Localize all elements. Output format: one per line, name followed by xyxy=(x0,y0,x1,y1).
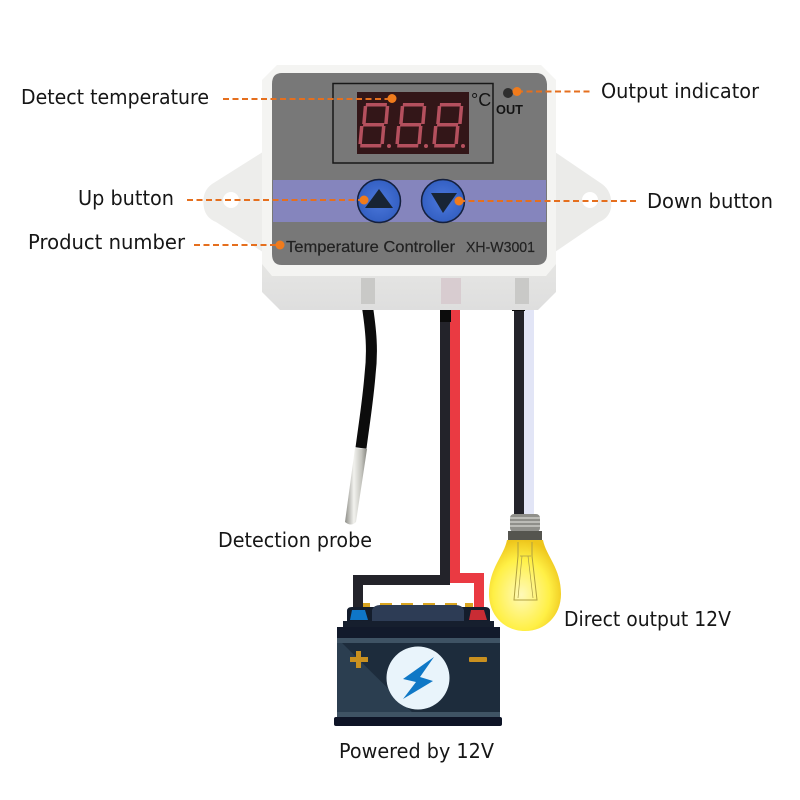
battery: body xyxy=(337,627,500,717)
battery: lightning badge xyxy=(386,646,450,710)
battery: red terminal xyxy=(469,610,487,620)
label: detection probe: Detection probe xyxy=(218,528,372,552)
button: down xyxy=(422,180,464,222)
callout: down button xyxy=(454,189,773,213)
wire: output pair to bulb xyxy=(512,303,534,514)
unit: degrees Celsius: °C xyxy=(471,90,491,110)
battery: top lid xyxy=(347,607,490,622)
wire: detection probe cable xyxy=(345,304,371,524)
digit 3 xyxy=(432,103,464,148)
button: up xyxy=(358,180,400,222)
display: red LED screen xyxy=(357,92,469,154)
device: mounting flanges xyxy=(203,150,611,254)
callout: product number: Product number xyxy=(28,230,186,254)
callout: detect temperature: Detect temperature xyxy=(21,85,209,109)
product model text: XH-W3001 xyxy=(466,239,535,256)
callout: down button: Down button xyxy=(647,189,773,213)
indicator: output LED xyxy=(503,88,513,98)
callout: up button xyxy=(78,186,368,210)
label: direct output 12V: Direct output 12V xyxy=(564,607,731,631)
device: grey front panel xyxy=(272,73,547,265)
product name text: Temperature Controller xyxy=(286,239,456,256)
panel: blue button band xyxy=(273,180,546,222)
battery xyxy=(334,603,502,726)
battery: yellow caps xyxy=(363,603,473,608)
battery: blue terminal xyxy=(350,610,368,620)
callout: output indicator: Output indicator xyxy=(601,79,760,103)
battery: minus sign xyxy=(469,657,487,662)
digit 2 xyxy=(395,103,426,148)
digit 1 xyxy=(358,103,390,148)
callout: up button: Up button xyxy=(78,186,174,210)
probe: steel tip xyxy=(345,448,367,524)
decimal points xyxy=(387,144,465,148)
battery: plus sign xyxy=(350,651,368,668)
label: powered by 12V: Powered by 12V xyxy=(339,739,494,763)
label: OUT: OUT xyxy=(496,102,523,117)
device: white housing xyxy=(262,65,556,310)
callout: output indicator xyxy=(512,79,760,103)
wire: power pair to battery xyxy=(358,303,479,612)
bulb: output lamp xyxy=(489,514,561,631)
callout: product number xyxy=(28,230,284,254)
battery: base xyxy=(334,717,502,726)
display frame xyxy=(333,84,493,163)
callout: detect temperature xyxy=(21,85,396,109)
